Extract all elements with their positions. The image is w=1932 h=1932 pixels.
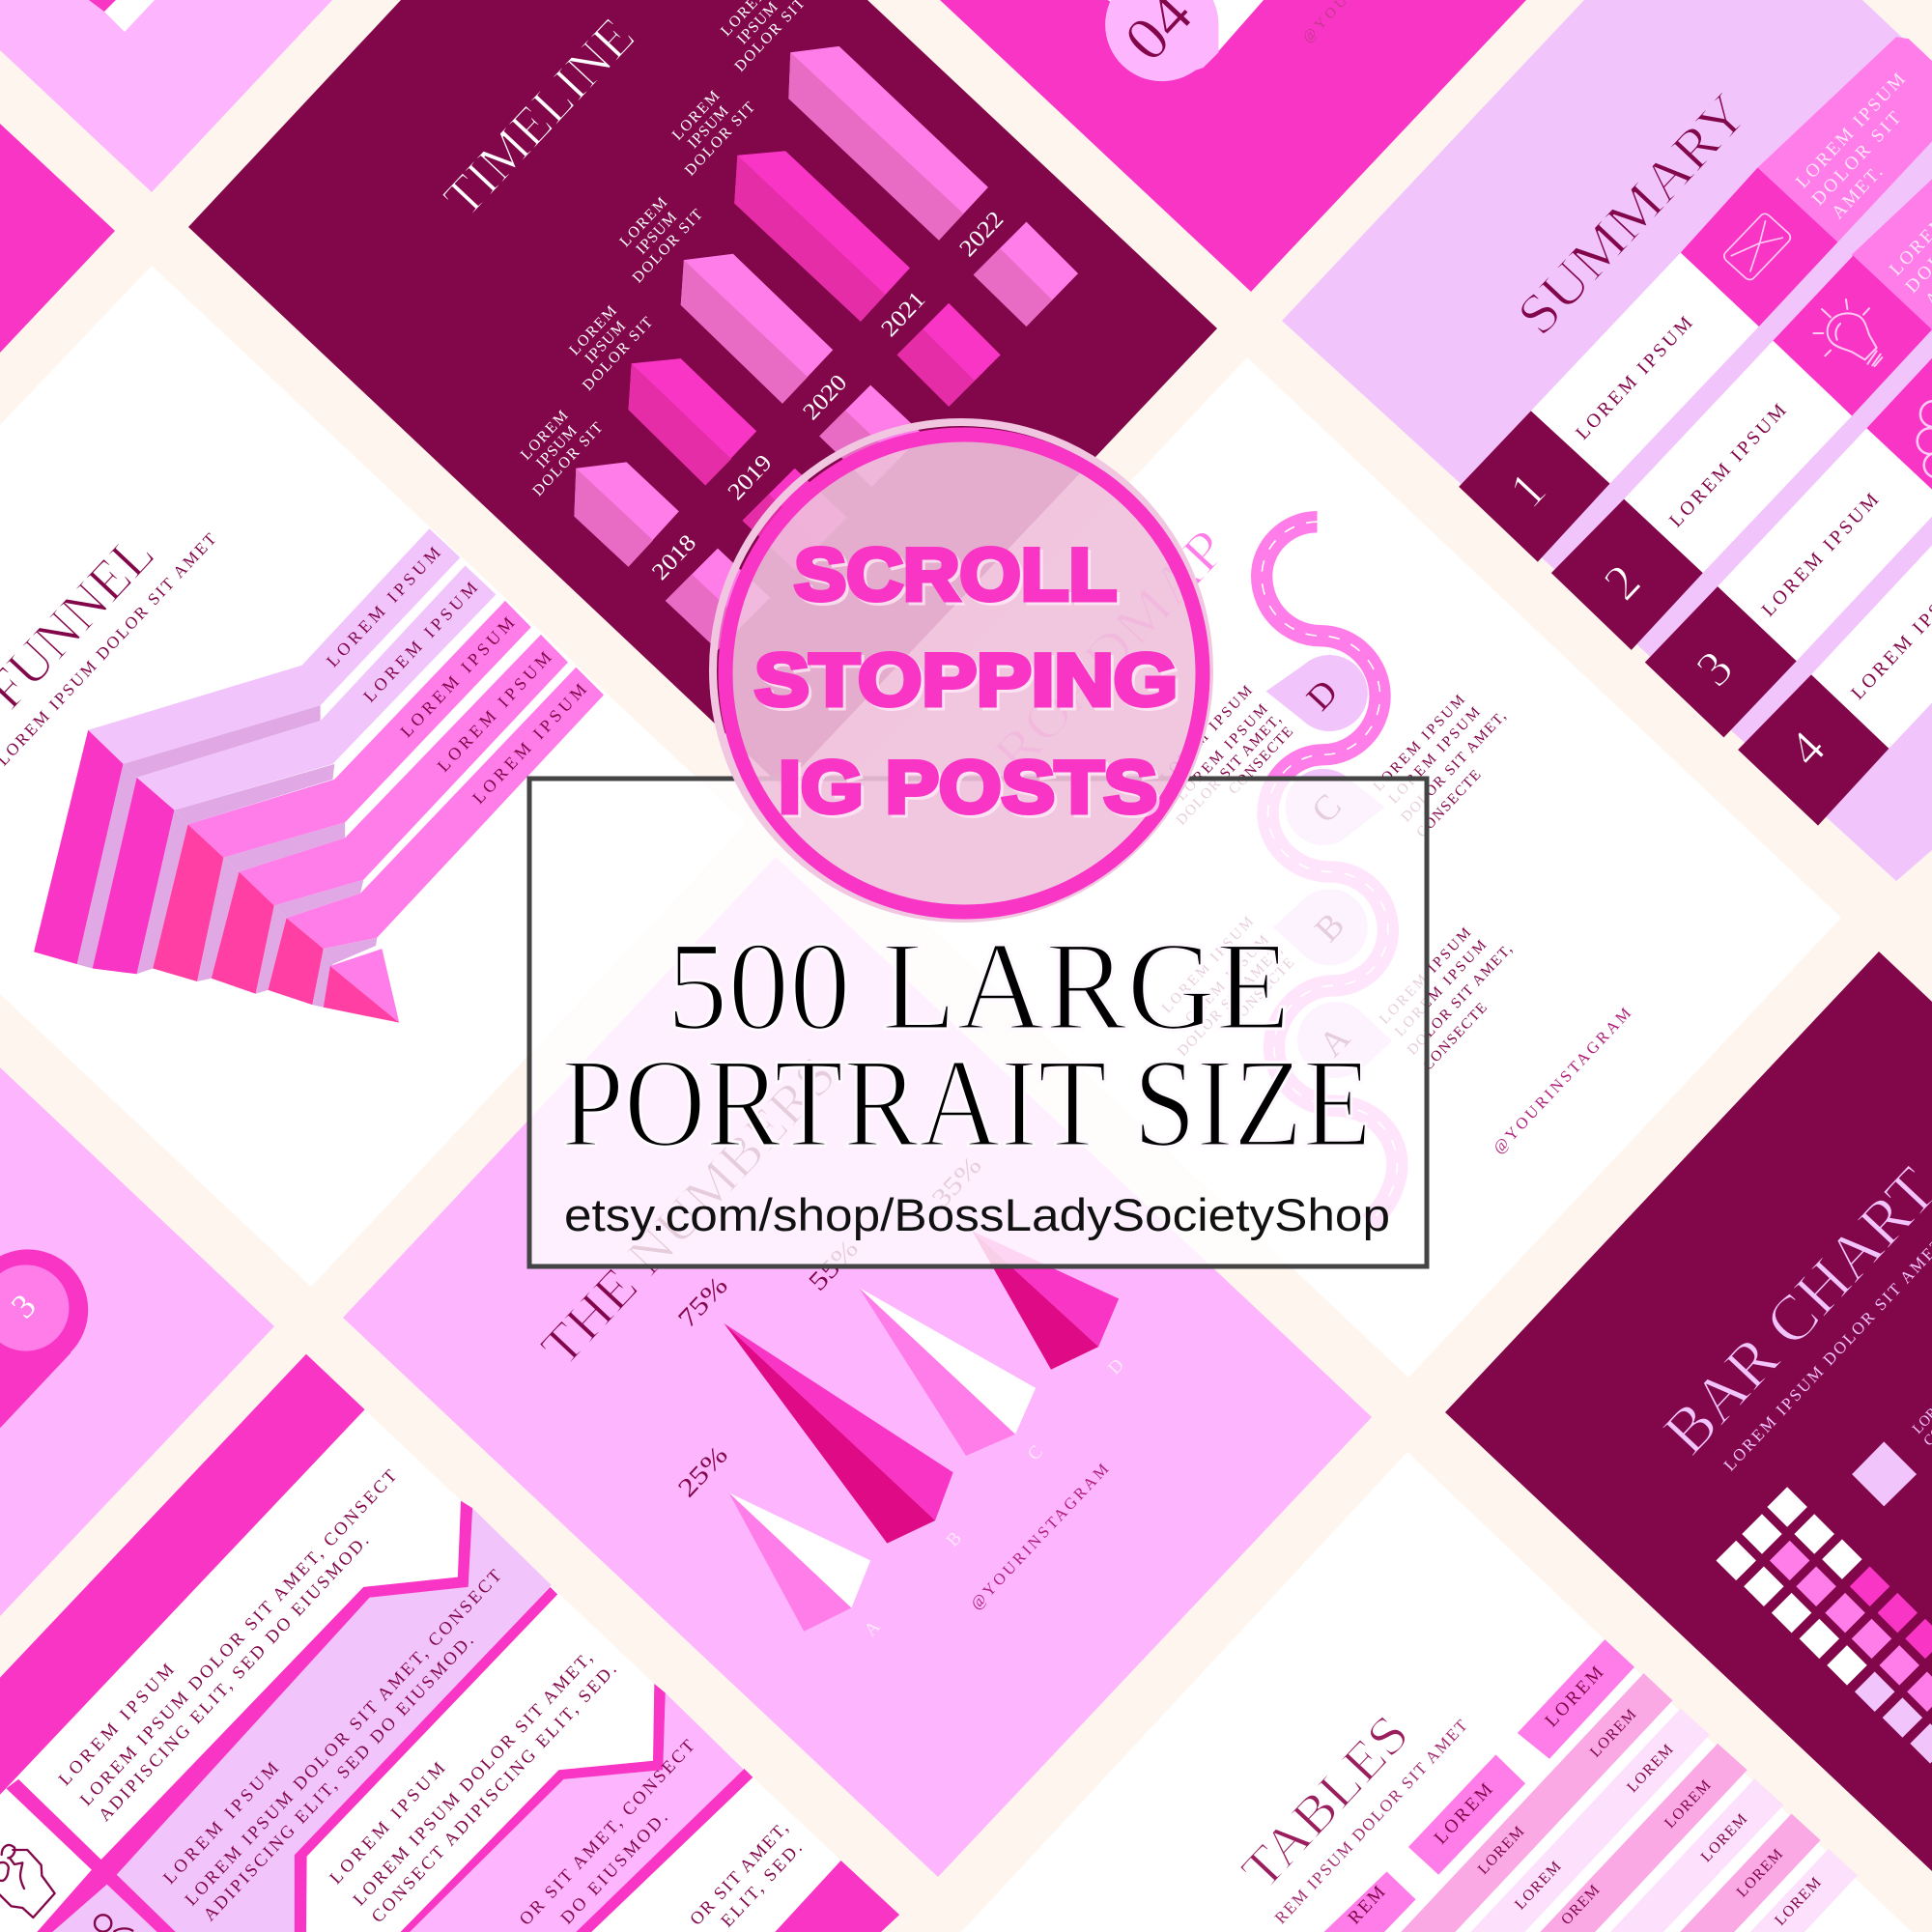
bar: 2020 (681, 254, 833, 404)
heading: the numbers: THE NUMBERS (530, 1045, 848, 1378)
icon: flower (1918, 401, 1932, 477)
bar: 2019 (629, 358, 756, 486)
table rows: LOREM (1662, 1777, 1714, 1832)
table rows: LOREM (1512, 1859, 1564, 1913)
summary icon cells (1681, 37, 1932, 502)
year labels: 2021 (876, 286, 930, 342)
band text: OR SIT AMET, (686, 1818, 792, 1929)
cone percentages: 35% (925, 1151, 987, 1213)
band text: DO EIUSMOD. (556, 1807, 671, 1927)
year labels: 2018 (647, 529, 701, 585)
badge text (754, 534, 1178, 829)
panel: lower left pink post (0, 1067, 274, 1616)
cone percentages: 25% (672, 1440, 733, 1502)
table rows: OREM (1558, 1882, 1603, 1928)
lower right content: bar chart, tables (1231, 1004, 1932, 1932)
panel: summary background (1282, 0, 1932, 881)
bar: 2021 (734, 151, 910, 322)
badge text: IG POSTS (779, 747, 1157, 829)
roadmap captions: LOREM IPSUM (1159, 913, 1257, 1016)
band text: OR SIT AMET, CONSECT (516, 1736, 698, 1929)
year labels: 2019 (723, 449, 778, 505)
heading: timeline: TIMELINE (433, 7, 646, 229)
title: 500 large: 500 LARGE (667, 915, 1291, 1057)
icon: people (95, 1915, 132, 1932)
timeline captions: LOREM (518, 408, 572, 464)
chart: winding road (1262, 522, 1397, 1223)
timeline captions: DOLOR SIT (529, 419, 607, 499)
summary side text (1792, 70, 1932, 311)
cone percentages: 55% (803, 1234, 864, 1296)
table rows: LOREM (1624, 1742, 1677, 1796)
table header cells: REM (1345, 1882, 1389, 1928)
roadmap captions: CONSECTE (1419, 1000, 1491, 1073)
step 3 badge: 3 (3, 1287, 43, 1325)
band text: ADIPISCING ELIT, SED DO EIUSMOD. (95, 1531, 372, 1825)
roadmap captions: CONSECTE (1225, 724, 1296, 798)
handle: instagram, numbers: @YOURINSTAGRAM (967, 1460, 1112, 1613)
table header cells: LOREM (1431, 1779, 1496, 1848)
roadmap captions: DOLOR SIT AMET, (1398, 708, 1509, 825)
table header cells (1324, 1639, 1634, 1932)
band text: CONSECT ADIPISCING ELIT, SED. (368, 1660, 620, 1926)
roadmap captions: LOREM IPSUM (1377, 924, 1474, 1028)
badge text: STOPPING (754, 639, 1178, 722)
roadmap nodes: D (1299, 672, 1346, 719)
cone letters: C (1024, 1442, 1047, 1464)
summary rows (1531, 252, 1932, 749)
bar: 2022 (788, 46, 988, 241)
title: portrait size: PORTRAIT SIZE (561, 1032, 1372, 1174)
table rows: LOREM (1698, 1811, 1750, 1865)
timeline captions: LOREM (617, 194, 670, 250)
cone percentages: 75% (672, 1270, 733, 1333)
timeline captions: IPSUM (734, 0, 781, 47)
funnel subtitle: LOREM IPSUM DOLOR SIT AMET (0, 529, 220, 769)
summary row labels (1572, 312, 1932, 704)
panel: tables background (961, 1452, 1912, 1932)
roadmap captions (1157, 682, 1516, 1073)
timeline captions: DOLOR SIT (630, 206, 706, 286)
funnel labels: LOREM IPSUM (359, 578, 481, 706)
cone chart (724, 1231, 1119, 1632)
timeline captions (518, 0, 809, 499)
panel: feature bands (0, 1354, 899, 1932)
year labels (647, 207, 1009, 585)
band text: LOREM IPSUM DOLOR SIT AMET, CONSECT (181, 1566, 505, 1909)
summary number squares: 1 (1499, 462, 1557, 519)
shop url: etsy.com/shop/BossLadySocietyShop (564, 1189, 1390, 1240)
year blocks (666, 222, 1078, 650)
summary row labels: LOREM IPSUM (1665, 400, 1790, 531)
band text: LOREM IPSUM DOLOR SIT AMET, CONSECT (76, 1466, 400, 1809)
tables subtitle: REM IPSUM DOLOR SIT AMET (1271, 1716, 1471, 1927)
roadmap nodes: B (1307, 905, 1352, 950)
summary number squares: 4 (1778, 721, 1836, 777)
top right content: step 04, summary, roadmap (982, 0, 1932, 1223)
year labels: 2020 (798, 370, 852, 425)
band text: LOREM IPSUM (159, 1758, 282, 1888)
text box background (529, 779, 1427, 1266)
table rows: LOREM (1587, 1706, 1639, 1761)
table rows: LOREM (1772, 1875, 1825, 1929)
year labels: 2022 (954, 207, 1009, 262)
badge text: SCROLL (794, 534, 1117, 616)
roadmap captions: LOREM IPSUM (1392, 937, 1490, 1039)
band text: LOREM IPSUM (55, 1660, 178, 1789)
table rows (1401, 1673, 1858, 1932)
timeline captions: IPSUM (633, 209, 680, 258)
summary side text: AMET. (1828, 162, 1887, 223)
timeline captions: LOREM (566, 303, 620, 358)
summary number squares: 2 (1593, 554, 1651, 611)
roadmap nodes: C (1304, 786, 1350, 831)
roadmap captions: LOREM IPSUM (1157, 682, 1256, 785)
funnel labels: LOREM IPSUM (323, 543, 444, 670)
summary side text: LOREM IPSUM (1792, 70, 1910, 192)
icon: envelope (1724, 213, 1790, 279)
chart: 3D funnel (34, 528, 604, 1023)
panel: left hot pink post (0, 124, 115, 353)
band text: ELIT, SED. (717, 1838, 806, 1931)
band text: LOREM IPSUM DOLOR SIT AMET, (349, 1648, 596, 1909)
roadmap nodes: A (1312, 1018, 1358, 1065)
table header cells: LOREM (1542, 1662, 1607, 1731)
panel: timeline background (188, 0, 1217, 787)
cone percentages (672, 1151, 987, 1502)
heading: tables: TABLES (1231, 1704, 1421, 1901)
table rows: LOREM (1475, 1824, 1527, 1878)
band text (55, 1466, 806, 1931)
roadmap nodes (1266, 655, 1392, 1078)
chart: square grid (1716, 1487, 1932, 1764)
step 04 badge (1105, 0, 1264, 81)
funnel labels (323, 543, 590, 808)
badge: scroll stopping (713, 422, 1209, 919)
roadmap captions: LOREM IPSUM (1385, 704, 1484, 807)
cone letters: A (861, 1617, 885, 1640)
roadmap captions: DOLOR SIT AMET, (1404, 941, 1516, 1058)
roadmap captions: DOLOR SIT AMET, (1173, 711, 1285, 829)
roadmap captions: CONSECTE (1413, 767, 1484, 840)
funnel labels: LOREM IPSUM (469, 680, 590, 808)
timeline captions: IPSUM (533, 423, 581, 471)
roadmap captions: LOREM IPSUM (1370, 692, 1468, 795)
cone letters: D (1104, 1355, 1128, 1378)
table rows: LOREM (1734, 1846, 1786, 1900)
funnel content (0, 522, 604, 1023)
summary side text: DOLOR SIT (1808, 108, 1905, 210)
panel: the numbers background (343, 857, 1372, 1877)
handle: instagram, roadmap: @YOURINSTAGRAM (1490, 1004, 1634, 1157)
band text: LOREM IPSUM (326, 1758, 448, 1888)
lower left content: step 3, feature bands, numbers (0, 1045, 1128, 1932)
panel: step 04 hot pink post (940, 0, 1526, 292)
panel: bar chart background (1445, 952, 1932, 1871)
timeline captions: DOLOR SIT (682, 99, 758, 179)
icon: lightbulb (1813, 299, 1882, 366)
funnel labels: LOREM IPSUM (396, 613, 518, 741)
summary row labels: LOREM IPSUM (1758, 490, 1883, 620)
funnel labels: LOREM IPSUM (434, 647, 555, 776)
timeline captions: DOLOR SIT (580, 314, 656, 394)
timeline captions: IPSUM (582, 318, 629, 367)
timeline captions: LOREM (669, 88, 723, 144)
bar: 2018 (574, 462, 679, 567)
panel: funnel background (0, 266, 746, 1287)
roadmap captions: LOREM IPSUM (1175, 931, 1272, 1035)
bar chart legend (1852, 1388, 1932, 1506)
panel: top-left pink post (0, 0, 332, 192)
heading: summary: SUMMARY (1505, 81, 1759, 347)
cone letters: B (943, 1528, 966, 1551)
cone letters (861, 1355, 1128, 1640)
summary row labels: LOREM IPSUM (1572, 312, 1696, 443)
panel: roadmap background (814, 357, 1841, 1378)
timeline content (433, 0, 1078, 650)
step 3 badge (0, 1249, 88, 1428)
summary number squares (1459, 411, 1889, 826)
roadmap captions: LOREM IPSUM (1173, 700, 1271, 804)
roadmap captions: DOLOR SIT AMET, (1175, 942, 1286, 1060)
roadmap captions: CONSECTE (1227, 954, 1297, 1029)
icon: raised fist (0, 1845, 55, 1918)
heading: roadmap: ROADMAP (982, 518, 1238, 785)
timeline captions: IPSUM (685, 103, 732, 152)
summary number squares: 3 (1686, 640, 1744, 697)
band text: ADIPISCING ELIT, SED DO EIUSMOD. (199, 1631, 477, 1924)
